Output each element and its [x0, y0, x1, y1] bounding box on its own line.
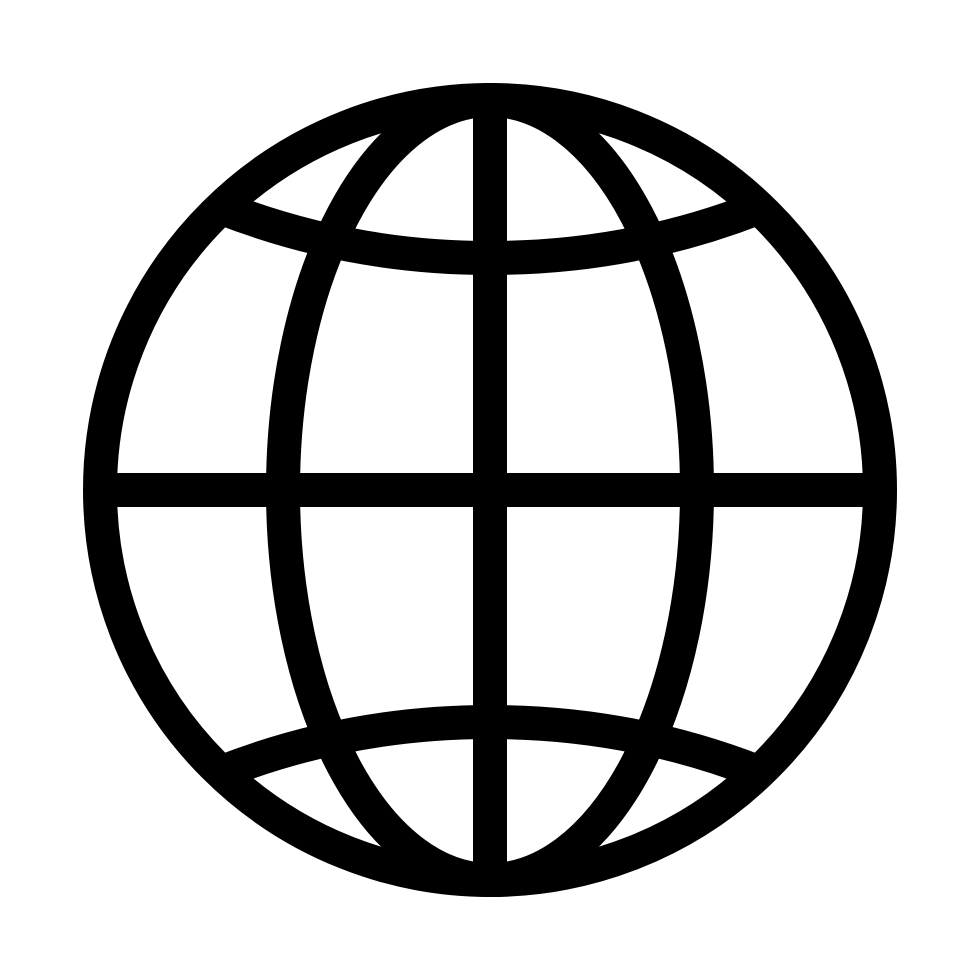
- equator: [100, 473, 880, 507]
- vertical axis: [473, 100, 507, 880]
- lower latitude curve: [222, 722, 758, 772]
- upper latitude curve: [222, 208, 758, 258]
- meridian ellipse: [283, 100, 697, 880]
- outer circle: [100, 100, 880, 880]
